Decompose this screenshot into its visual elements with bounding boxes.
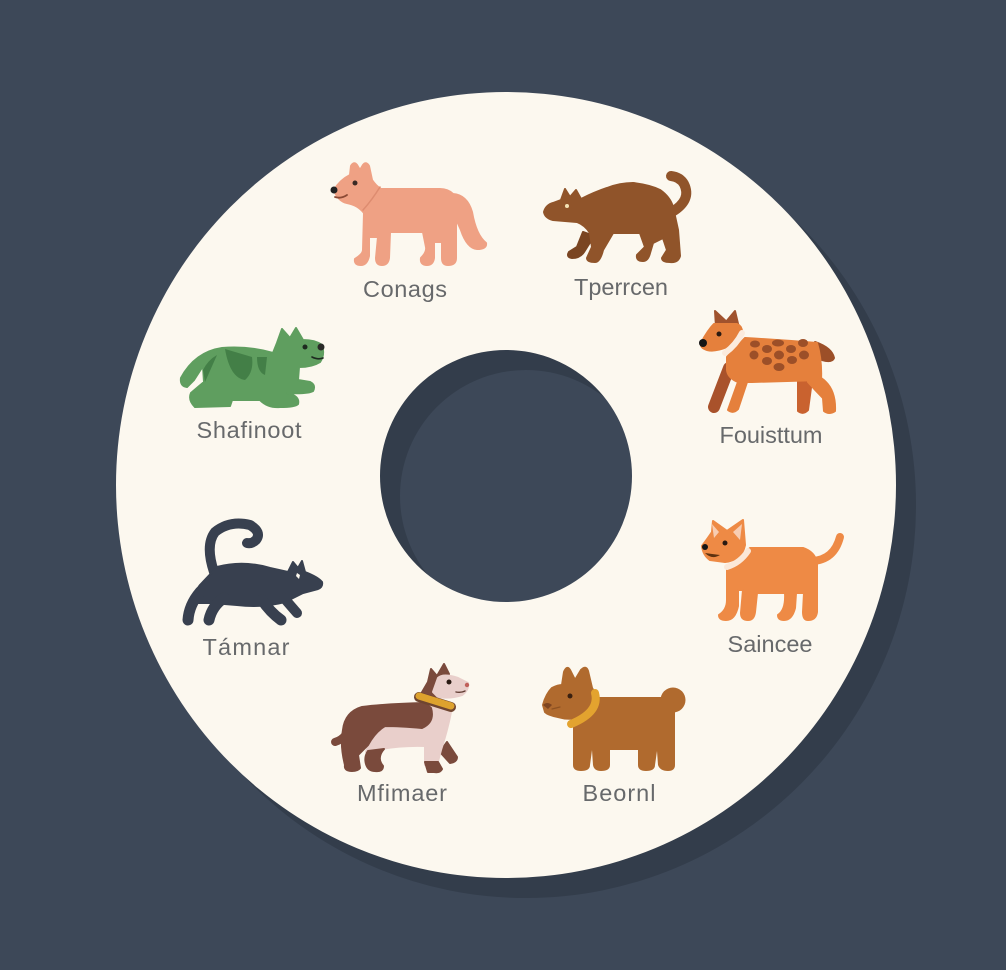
cream ring disc: [116, 92, 896, 878]
label: Támnar: Támnar: [202, 634, 290, 660]
animal: spotted orange dog Fouisttum: [699, 311, 835, 413]
animal: green cat Shafinoot: [181, 328, 324, 407]
animal: brown creature Tperrcen: [544, 176, 686, 262]
animal: salmon dog Conags: [330, 163, 486, 265]
label: Beornl: Beornl: [582, 780, 656, 806]
animal: orange dog Saincee: [702, 520, 840, 620]
animal: dark creature Támnar: [188, 524, 322, 620]
disc shadow: [136, 112, 916, 898]
animal: brown and pink dog Mfimaer: [335, 664, 469, 772]
label: Fouisttum: Fouisttum: [720, 422, 822, 448]
animal: bear-like brown dog Beornl: [543, 668, 686, 771]
label: Tperrcen: Tperrcen: [574, 274, 668, 300]
label: Conags: Conags: [363, 276, 447, 302]
label: Shafinoot: Shafinoot: [196, 417, 302, 443]
label: Saincee: Saincee: [728, 631, 812, 657]
label: Mfimaer: Mfimaer: [357, 780, 447, 806]
